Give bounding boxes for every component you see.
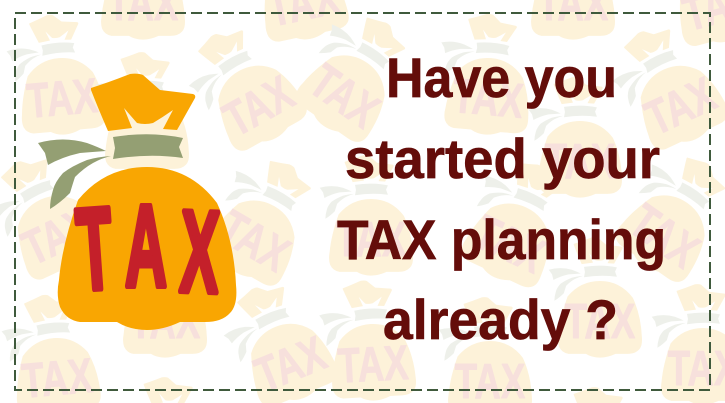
background pattern of faded tax bags: TAX <box>620 194 709 279</box>
bag lettering: TAX: X <box>178 187 221 318</box>
background pattern of faded tax bags: TAX <box>336 213 407 267</box>
headline question: Have you <box>386 46 617 109</box>
bag lettering: TAX: T <box>73 184 117 315</box>
headline question: TAX planning <box>337 208 666 271</box>
background pattern of faded tax bags: TAX <box>450 69 526 129</box>
background pattern of faded tax bags: TAX <box>14 197 101 276</box>
background pattern of faded tax bags: TAX <box>25 69 100 129</box>
background pattern of faded tax bags: TAX <box>565 295 636 349</box>
background pattern of faded tax bags: TAX <box>210 201 298 283</box>
headline question: started your <box>345 127 660 190</box>
bag lettering: TAX: A <box>125 182 167 311</box>
background pattern of faded tax bags: TAX <box>336 336 410 394</box>
background pattern of faded tax bags: TAX <box>215 66 303 147</box>
background pattern of faded tax bags: TAX <box>248 326 334 403</box>
background pattern of faded tax bags: TAX <box>130 295 201 349</box>
bag lettering: TAX <box>73 182 221 318</box>
headline question: already ? <box>383 288 618 351</box>
background pattern of faded tax bags: TAX <box>300 54 389 139</box>
background pattern of faded tax bags: TAX <box>545 135 616 189</box>
background pattern of faded tax bags: TAX <box>466 205 553 284</box>
headline question <box>337 46 666 351</box>
icon: orange tax money bag <box>38 74 236 330</box>
